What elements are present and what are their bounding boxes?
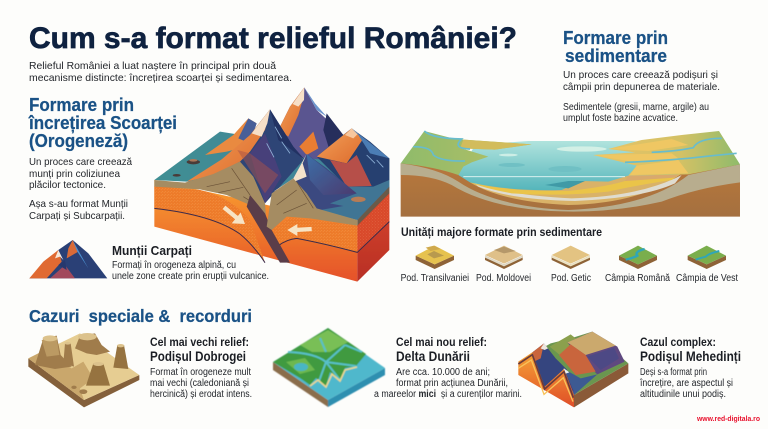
text block: Muntii Carpati (112, 244, 269, 282)
unit: Pod. Getic (551, 246, 591, 284)
intro text: Relieful României a luat naștere în principal prin două (29, 60, 276, 72)
unit: Pod. Moldovei: Pod. Moldovei (476, 273, 531, 284)
heading: orogeneza: Formare prin (29, 95, 134, 115)
units row (401, 246, 738, 284)
source url: www.red-digitala.ro (696, 414, 760, 423)
heading: orogeneza: (Orogeneză) (29, 131, 128, 151)
unit: Pod. Transilvaniei (401, 246, 469, 284)
text block: Dobrogea: Format în orogeneze mult (150, 367, 251, 378)
text block: Delta Dunarii (374, 337, 522, 400)
unit: Pod. Getic: Pod. Getic (551, 273, 591, 284)
icon: Mehedinti plateau (518, 332, 628, 407)
unit: Campia Romana: Câmpia Română (605, 273, 670, 284)
text block: orogeneza: Un proces care creează (29, 156, 132, 168)
text block: Muntii Carpati: Formați în orogeneza alpină, cu (112, 260, 236, 271)
text block: sedimentare: câmpii prin depunerea de materiale. (563, 81, 720, 93)
text block: Delta Dunarii: Delta Dunării (396, 349, 470, 364)
text block: Mehedinti: Cazul complex: (640, 337, 716, 349)
text block: Mehedinti: altitudinile unui podiș. (640, 389, 726, 400)
text block: Mehedinti (639, 337, 741, 400)
text block: orogeneza: munți prin coliziunea (29, 168, 120, 180)
text block: Dobrogea: Cel mai vechi relief: (150, 337, 249, 349)
icon: Dobrogea plateau (28, 333, 139, 407)
heading: special cases: Cazuri speciale & recorduri (29, 306, 252, 326)
unit: Pod. Transilvaniei: Pod. Transilvaniei (401, 273, 469, 284)
text block: sedimentare (563, 69, 720, 124)
text block: Dobrogea: hercinică) și erodat intens. (150, 389, 252, 400)
unit: Campia de Vest (676, 246, 738, 284)
text block: Mehedinti: Deși s-a format prin (640, 367, 707, 378)
heading: sedimentare: Formare prin (563, 28, 668, 48)
text block: orogeneza: Așa s-au format Munții (29, 198, 128, 210)
text block: Delta Dunarii: Cel mai nou relief: (396, 337, 487, 349)
illustration: sedimentary basin (401, 131, 740, 217)
illustration: mountain block with tectonic collision (154, 87, 389, 282)
text block: orogeneza: Carpați și Subcarpații. (29, 210, 125, 222)
unit: Pod. Moldovei (476, 246, 531, 284)
text block: Dobrogea: mai vechi (caledoniană și (150, 378, 249, 389)
text block: orogeneza (29, 156, 132, 222)
heading: orogeneza: încrețirea Scoarței (28, 113, 177, 133)
heading: major units: Unități majore formate prin sedimentare (401, 225, 602, 239)
icon: Danube Delta (273, 328, 385, 407)
heading: sedimentare (563, 28, 668, 66)
heading: orogeneza (28, 95, 177, 151)
text block: Dobrogea: Podișul Dobrogei (150, 349, 246, 364)
text block: Delta Dunarii: Are cca. 10.000 de ani; (396, 367, 490, 378)
text block: Muntii Carpati: unele zone create prin erupții vulcanice. (112, 271, 269, 282)
text block: Muntii Carpati: Munții Carpați (112, 244, 192, 258)
text block: orogeneza: plăcilor tectonice. (29, 179, 106, 191)
text block: Delta Dunarii: a mareelor mici și a curenților marini. (374, 389, 522, 400)
heading: sedimentare: sedimentare (565, 46, 667, 66)
text block: sedimentare: Un proces care creează podișuri și (563, 69, 718, 81)
intro text (29, 60, 292, 84)
icon: Carpathian mountains (29, 240, 107, 278)
unit: Campia Romana (605, 246, 670, 284)
text block: Delta Dunarii: format prin acțiunea Dunării, (396, 378, 508, 389)
title: Cum s-a format relieful României? (29, 22, 517, 55)
text block: sedimentare: umplut foste bazine acvatice. (563, 113, 678, 124)
text block: sedimentare: Sedimentele (gresii, marne, argile) au (563, 102, 709, 113)
text block: Mehedinti: încrețire, are aspectul și (639, 378, 733, 389)
intro text: mecanisme distincte: încrețirea scoarței și sedimentarea. (29, 72, 292, 84)
unit: Campia de Vest: Câmpia de Vest (676, 273, 738, 284)
text block: Mehedinti: Podișul Mehedinți (640, 349, 741, 364)
text block: Dobrogea (150, 337, 252, 400)
